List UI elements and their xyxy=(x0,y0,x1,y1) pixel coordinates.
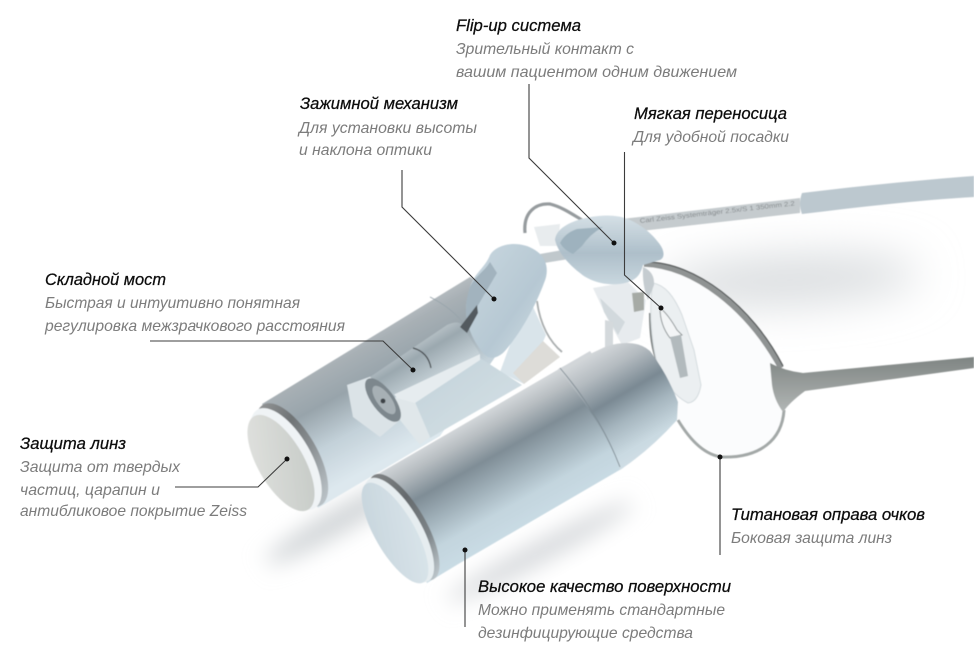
clear nose bridge piece xyxy=(593,282,646,349)
dot xyxy=(410,368,416,372)
bridge bar xyxy=(540,248,575,263)
leader xyxy=(150,341,413,370)
callout: lens protection xyxy=(20,435,290,520)
front barrel xyxy=(349,343,678,592)
description line 2: дезинфицирующие средства xyxy=(478,625,693,642)
dot xyxy=(284,456,290,462)
dot xyxy=(658,306,664,310)
description: Зрительный контакт с xyxy=(456,41,634,58)
leader xyxy=(624,152,661,308)
far lens rim wire xyxy=(537,301,562,352)
upper temple arm with engraved text: Carl Zeiss Systemträger 2.5x/S 1 350mm 2.2 xyxy=(639,200,796,225)
description line 3: антибликовое покрытие Zeiss xyxy=(20,503,247,520)
wire loop and bracket xyxy=(525,204,582,246)
callout: flip-up system xyxy=(456,17,737,246)
light wedge behind clamp xyxy=(500,296,560,384)
folding bridge mechanism xyxy=(347,322,522,445)
callout: clamp mechanism xyxy=(297,95,496,302)
dot xyxy=(462,548,468,552)
heading: Flip-up система xyxy=(456,17,581,35)
callout: folding bridge xyxy=(44,271,416,372)
heading: Складной мост xyxy=(45,271,166,289)
description line 2: и наклона оптики xyxy=(299,142,432,159)
callout: titanium frame xyxy=(718,454,925,555)
leader xyxy=(719,457,721,555)
description line 2: регулировка межзрачкового расстояния xyxy=(44,318,345,335)
illustration: binocular loupes on titanium frame xyxy=(234,176,974,592)
leader xyxy=(529,84,614,243)
heading: Мягкая переносица xyxy=(634,105,787,123)
soft nose pad xyxy=(643,267,701,403)
leader xyxy=(464,550,466,627)
heading: Зажимной механизм xyxy=(300,95,458,113)
dot xyxy=(492,296,496,302)
heading: Защита линз xyxy=(20,435,126,453)
lower temple arm xyxy=(770,357,974,412)
callout: soft nose bridge xyxy=(624,105,789,310)
dot xyxy=(718,454,722,460)
rear barrel xyxy=(234,277,510,521)
soft shadows xyxy=(260,249,921,610)
description: Быстрая и интуитивно понятная xyxy=(45,295,300,312)
eyeglass lens and rim xyxy=(644,262,784,457)
heading: Высокое качество поверхности xyxy=(478,578,731,596)
clamp mechanism xyxy=(460,244,547,358)
callout: surface quality xyxy=(462,548,731,642)
description line 2: вашим пациентом одним движением xyxy=(456,64,737,81)
flip-up block xyxy=(555,215,664,284)
description: Для удобной посадки xyxy=(631,129,789,146)
description: Для установки высоты xyxy=(297,120,477,137)
description: Можно применять стандартные xyxy=(478,602,725,619)
description line 2: частиц, царапин и xyxy=(20,482,160,499)
leader xyxy=(175,459,287,487)
description: Боковая защита линз xyxy=(731,530,892,547)
heading: Титановая оправа очков xyxy=(731,506,925,524)
upper temple arm with engraved text xyxy=(622,176,974,232)
dot xyxy=(612,240,616,246)
description: Защита от твердых xyxy=(20,459,181,476)
leader xyxy=(402,170,494,299)
